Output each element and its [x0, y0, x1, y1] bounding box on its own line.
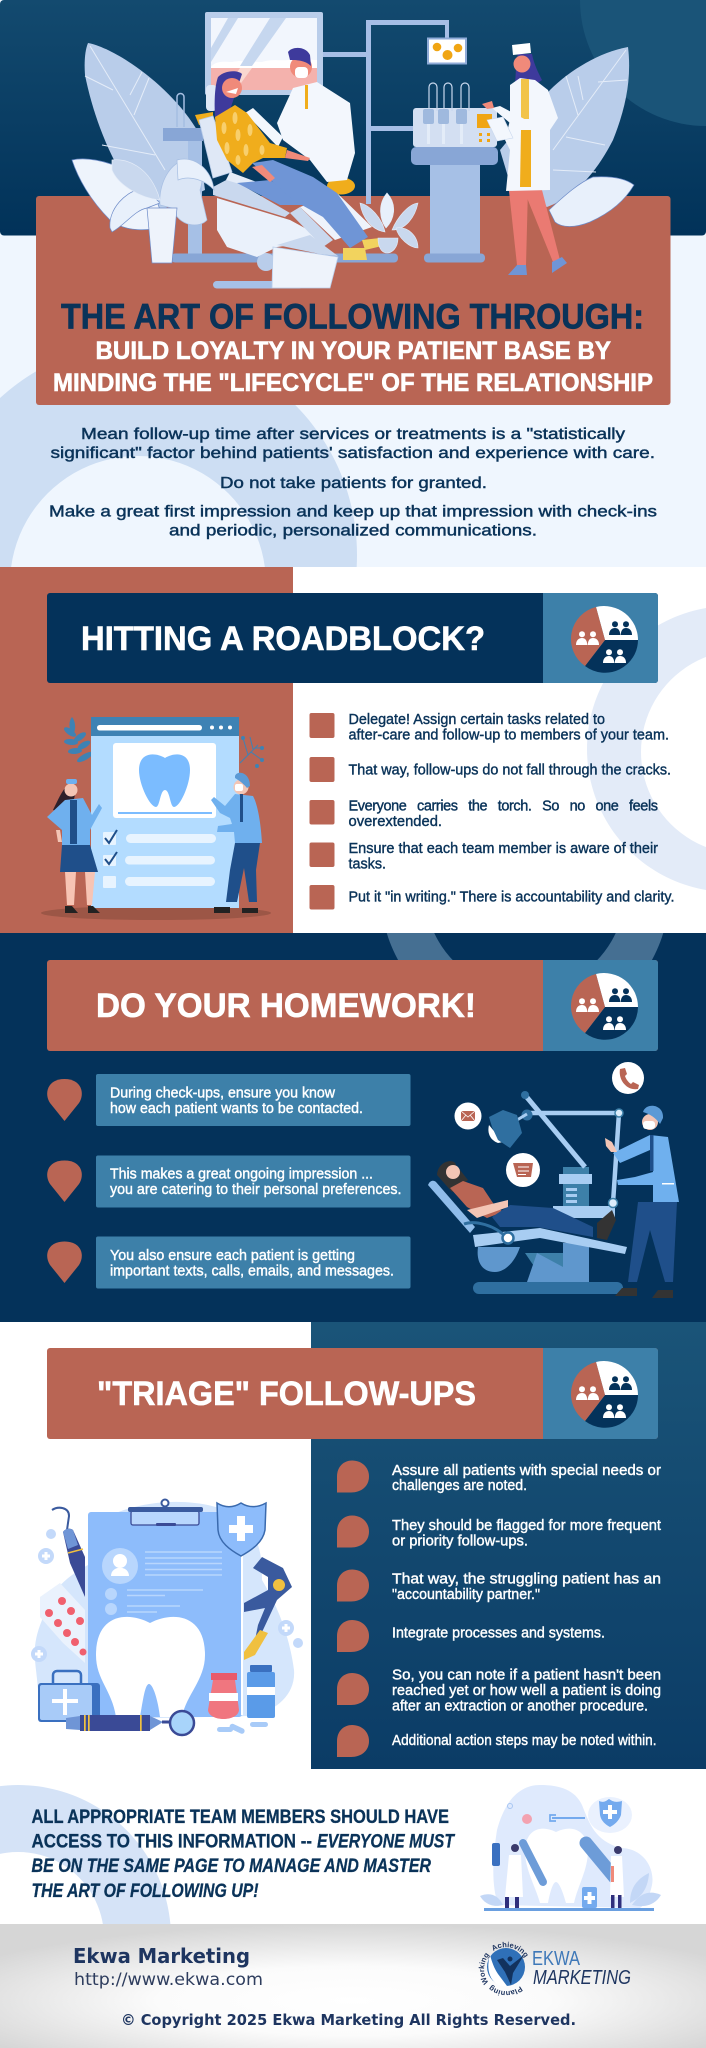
icon: right branch [240, 736, 264, 768]
logo: ekwa marketing: MARKETING [533, 1967, 631, 1989]
closing statement: ACCESS TO THIS INFORMATION -- [32, 1830, 312, 1852]
list item: messages [47, 1236, 410, 1288]
list item: messages: important texts, calls, emails, and messages. [110, 1264, 394, 1280]
icon: tooth [96, 1617, 205, 1717]
illustration: dentists cleaning giant tooth [480, 1785, 661, 1911]
intro text block: and periodic, personalized communications. [169, 522, 537, 540]
shield halo [588, 1797, 632, 1833]
list: triage bullets: Additional action steps may be noted within. [392, 1733, 656, 1749]
list: roadblock bullets: tasks. [348, 856, 386, 872]
icon: chat bubble [506, 1153, 540, 1187]
closing statement: BE ON THE SAME PAGE TO MANAGE AND MASTER [32, 1855, 431, 1877]
illustration: dental clinic scene [72, 12, 634, 288]
subtitle [53, 337, 653, 397]
illustration: chair base bar [171, 254, 398, 262]
illustration: patient [437, 1161, 616, 1244]
icon: floating tool [508, 1804, 585, 1824]
footer: company name and url: Ekwa Marketing [73, 1944, 250, 1968]
icon: shield [217, 1503, 266, 1556]
panel: triage section [0, 1322, 706, 1769]
intro text block: Do not take patients for granted. [220, 475, 487, 492]
illustration: potted plant right [360, 193, 418, 253]
icon: right dentist [610, 1846, 624, 1909]
icon: pill blister [40, 1583, 86, 1663]
illustration: left big leaf [85, 43, 205, 215]
logo: ekwa marketing: Achieving [492, 1942, 528, 1958]
list: triage bullets: after an extraction or another procedure. [392, 1698, 648, 1714]
icon: phone bubble [612, 1062, 644, 1094]
heading: hitting a roadblock: HITTING A ROADBLOCK? [81, 620, 485, 658]
list item: contact preference [47, 1074, 410, 1126]
illustration: window [205, 12, 323, 95]
list: roadblock bullets: Everyone carries the torch. So no one feels [348, 798, 658, 814]
intro text block: significant" factor behind patients' satisfaction and experience with care. [50, 445, 655, 462]
footer: company name and url: http://www.ekwa.com [74, 1970, 263, 1990]
list: triage bullets: or priority follow-ups. [392, 1534, 528, 1550]
icon: team pie [571, 973, 638, 1040]
heading: hitting a roadblock [47, 593, 658, 683]
illustration: clipboard with tooth and tools [31, 1500, 303, 1735]
icon: left dentist [505, 1844, 523, 1909]
list item: ongoing impression [47, 1156, 410, 1208]
illustration: left lower leaf [72, 159, 165, 230]
illustration: tooth checklist with staff [41, 717, 271, 920]
heading: triage follow-ups: "TRIAGE" FOLLOW-UPS [97, 1375, 476, 1413]
icon: scaler handle [523, 1843, 543, 1882]
illustration: dental chair [195, 85, 372, 288]
intro text block: Make a great first impression and keep up that impression with check-ins [49, 504, 657, 520]
heading: triage follow-ups [47, 1348, 658, 1439]
icon: mail bubble [454, 1102, 482, 1130]
logo: ekwa marketing [478, 1942, 631, 1996]
illustration: dental machine [553, 1167, 615, 1283]
illustration: sink [163, 94, 203, 254]
subtitle: BUILD LOYALTY IN YOUR PATIENT BASE BY [96, 337, 611, 365]
decorative ring behind intro [0, 372, 357, 567]
icon: dental mirror [66, 1711, 194, 1735]
list: triage bullets: reached yet or how well a patient is doing [392, 1683, 661, 1699]
illustration: lamp arm [488, 1091, 623, 1208]
list: roadblock bullets: overextended. [348, 814, 442, 830]
panel: checklist screen [91, 717, 239, 908]
icon: medical kit [38, 1671, 100, 1722]
panel: do your homework section [0, 933, 706, 1322]
icon: shield [599, 1799, 622, 1827]
list: triage bullets [337, 1460, 661, 1757]
list: triage bullets: Integrate processes and systems. [392, 1626, 605, 1642]
panel: title backing [36, 196, 670, 405]
panel: closing section [0, 1769, 706, 1924]
illustration: foot plate [213, 281, 303, 288]
illustration: dentist treating patient [428, 1062, 679, 1298]
subtitle: MINDING THE "LIFECYCLE" OF THE RELATIONSHIP [53, 369, 653, 397]
list: triage bullets: Assure all patients with special needs or [392, 1463, 661, 1479]
list item: messages: You also ensure each patient is getting [110, 1248, 355, 1264]
footer: copyright: © Copyright 2025 Ekwa Marketing All Rights Reserved. [121, 2011, 576, 2029]
illustration: equipment stand [411, 83, 498, 262]
footer: company name and url [73, 1944, 263, 1990]
illustration: leaf veins [85, 46, 627, 172]
icon: tooth [525, 1829, 588, 1903]
intro text block [49, 426, 657, 540]
closing statement: THE ART OF FOLLOWING UP! [32, 1880, 259, 1902]
icon: tooth [139, 754, 190, 807]
panel: hitting a roadblock section [0, 567, 706, 933]
clipboard [88, 1512, 242, 1717]
list: triage bullets: So, you can note if a patient hasn't been [392, 1668, 661, 1684]
list: triage bullets: challenges are noted. [392, 1478, 527, 1494]
illustration: ceiling arm and x-ray box [323, 20, 466, 204]
profile card lines [102, 1548, 222, 1615]
list: roadblock bullets: Put it "in writing." There is accountability and clarity. [348, 890, 674, 906]
icon: left leaves [63, 717, 94, 764]
illustration: nurse [482, 43, 567, 275]
list: roadblock bullets: after-care and follow-up to members of your team. [348, 728, 669, 744]
illustration: dentist [245, 48, 355, 182]
list: roadblock bullets: Delegate! Assign certain tasks related to [348, 712, 605, 728]
footer background [0, 1924, 706, 2048]
illustration: chair [428, 1181, 627, 1294]
icon: medicine jar [582, 1887, 597, 1908]
illustration: potted plant left [110, 159, 214, 263]
illustration: right big leaf [500, 47, 629, 207]
list: triage bullets: That way, the struggling patient has an [392, 1572, 661, 1588]
icon: drill handle [586, 1843, 615, 1878]
logo: ekwa marketing: Working [478, 1952, 490, 1986]
icon: dental pliers [244, 1557, 292, 1660]
list item: ongoing impression: This makes a great ongoing impression ... [110, 1166, 373, 1182]
logo: ekwa marketing: EKWA [532, 1948, 581, 1970]
icon: plus bubbles [31, 1529, 303, 1662]
logo: ekwa marketing: Planning [489, 1985, 523, 1996]
title: THE ART OF FOLLOWING THROUGH: [61, 298, 644, 336]
list: roadblock bullets: Ensure that each team member is aware of their [348, 841, 658, 857]
icon: leaves [480, 1873, 661, 1906]
ground line [484, 1908, 654, 1911]
heading: do your homework: DO YOUR HOMEWORK! [96, 987, 476, 1025]
icon: capsules [217, 1722, 268, 1735]
closing statement: ALL APPROPRIATE TEAM MEMBERS SHOULD HAVE [32, 1806, 449, 1828]
illustration: male staff [211, 773, 262, 913]
icon: team pie [571, 1361, 638, 1428]
panel: hero header [0, 0, 706, 236]
intro text block: Mean follow-up time after services or treatments is a "statistically [81, 426, 625, 443]
icon: team pie [571, 606, 638, 673]
sweater pattern [222, 112, 264, 165]
icon: blue bottle [247, 1665, 275, 1718]
illustration: patient [215, 71, 386, 260]
illustration: female staff [47, 779, 102, 913]
icon: red bottle [208, 1673, 239, 1719]
list item: contact preference: During check-ups, ensure you know [110, 1086, 336, 1102]
list: roadblock bullets [310, 712, 674, 910]
clip [128, 1500, 203, 1526]
list item: contact preference: how each patient wants to be contacted. [110, 1101, 363, 1117]
illustration: right lower leaf [549, 177, 634, 226]
heading: do your homework [47, 960, 658, 1051]
closing statement [32, 1806, 456, 1902]
list item: ongoing impression: you are catering to their personal preferences. [110, 1182, 402, 1198]
icon: dental probe [52, 1508, 85, 1597]
closing statement: EVERYONE MUST [317, 1830, 456, 1852]
background blob [35, 1502, 294, 1720]
list: triage bullets: They should be flagged for more frequent [392, 1518, 661, 1534]
list: roadblock bullets: That way, follow-ups do not fall through the cracks. [348, 762, 671, 778]
icon: toothpaste tube [492, 1843, 500, 1866]
list: triage bullets: "accountability partner." [392, 1587, 540, 1603]
illustration: dentist [605, 1106, 679, 1298]
